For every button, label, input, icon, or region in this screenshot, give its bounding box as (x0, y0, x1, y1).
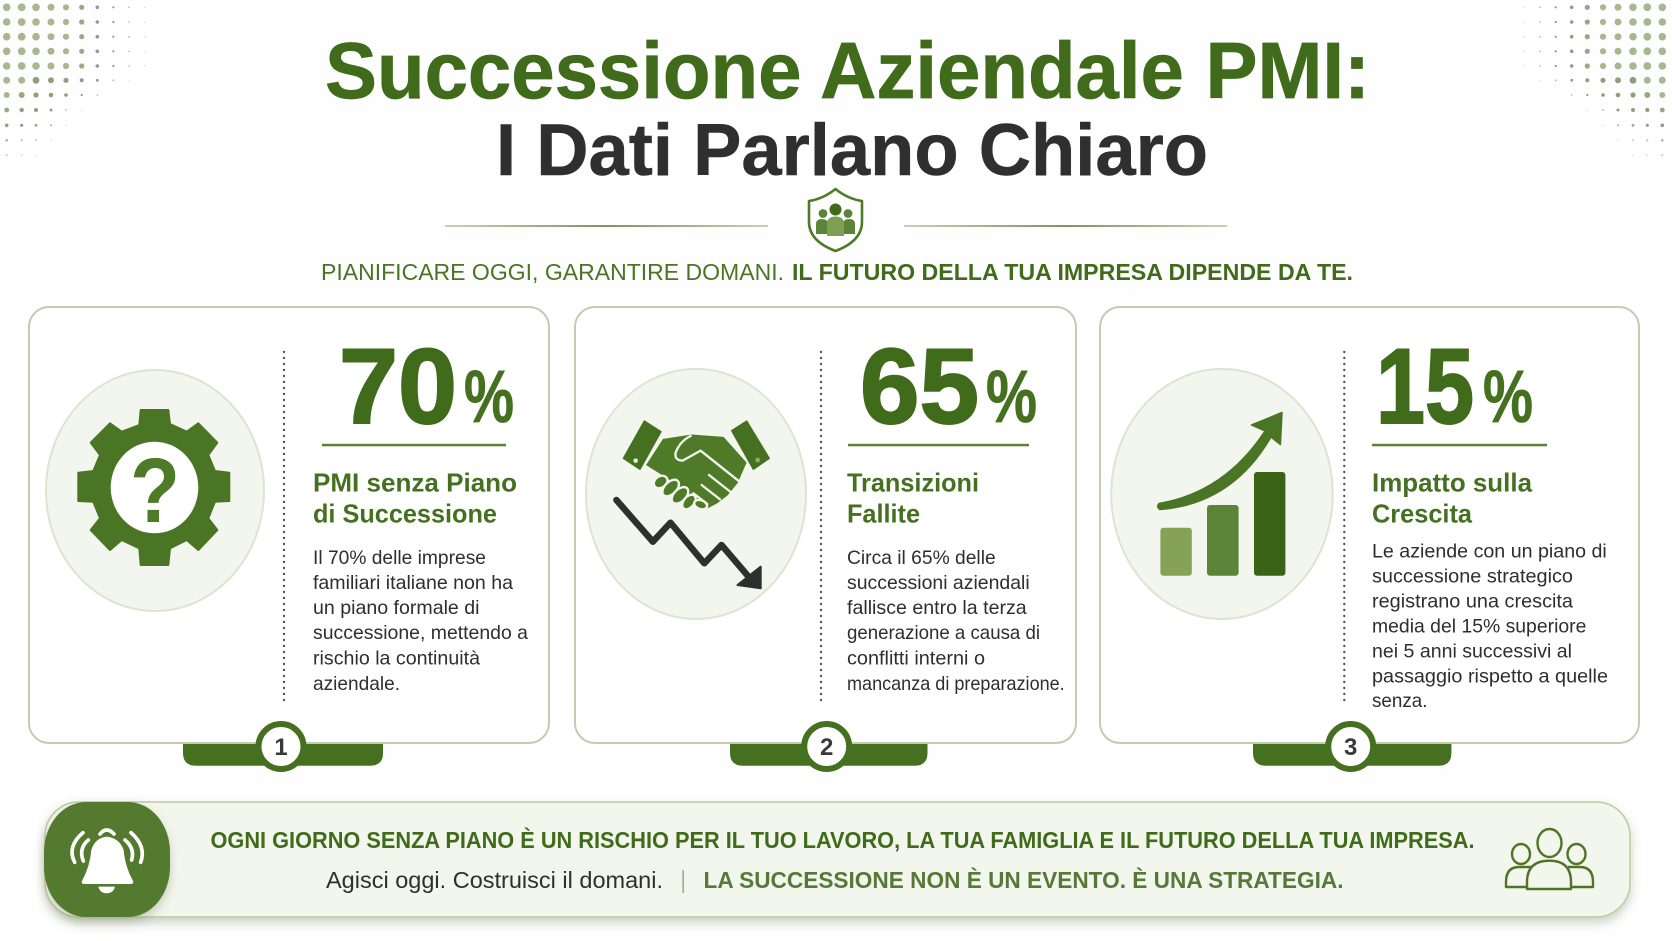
number tab 2 bar (730, 743, 928, 766)
icon: alarm bell on green block (44, 802, 170, 917)
stat 70%: 70 (339, 326, 457, 446)
icon: shield with people (809, 189, 862, 251)
number badge 3: 3 (1344, 734, 1357, 761)
body text: Il 70% delle imprese (313, 547, 486, 569)
heading: Transizioni (847, 468, 979, 498)
footer line: Agisci oggi. Costruisci il domani. (326, 867, 663, 893)
heading (1372, 468, 1533, 529)
body text: successioni aziendali (847, 572, 1030, 594)
stat 70%: % (464, 355, 514, 438)
icon circle: gear with question mark: ? (130, 440, 180, 542)
body text: successione, mettendo a (313, 622, 528, 644)
body text: Circa il 65% delle (847, 547, 996, 569)
dotted separator (820, 352, 822, 702)
body text: nei 5 anni successivi al (1372, 640, 1572, 662)
panel: footer callout (44, 802, 1630, 917)
heading: Crescita (1372, 499, 1473, 529)
heading (313, 468, 517, 529)
icon: people outline (1506, 829, 1593, 889)
body text: Le aziende con un piano di (1372, 540, 1607, 562)
icon: handshake (623, 421, 769, 512)
panel: card 3 (1100, 307, 1639, 769)
body text: passaggio rispetto a quelle (1372, 666, 1608, 688)
stat 15%: % (1483, 355, 1533, 438)
footer line (326, 866, 1344, 893)
body text (313, 547, 528, 695)
body text: generazione a causa di (847, 622, 1040, 644)
number badge 1 (258, 724, 304, 769)
body text: successione strategico (1372, 566, 1573, 588)
heading: Fallite (847, 499, 920, 529)
panel: card 2 (575, 307, 1076, 769)
arrow: falling zigzag (616, 500, 761, 588)
title (325, 26, 1370, 191)
stat 15%: 15 (1376, 326, 1474, 446)
body text: mancanza di preparazione. (847, 673, 1065, 695)
title: Successione Aziendale PMI: (325, 26, 1370, 115)
body text: registrano una crescita (1372, 590, 1573, 612)
stat 65%: % (986, 355, 1037, 438)
heading: di Successione (313, 499, 497, 529)
panel: card 1 (29, 307, 549, 769)
heading: Impatto sulla (1372, 468, 1533, 498)
footer line: LA SUCCESSIONE NON È UN EVENTO. È UNA STRATEGIA. (704, 866, 1344, 893)
subtitle: PIANIFICARE OGGI, GARANTIRE DOMANI. (321, 259, 784, 285)
stat 65% (860, 326, 1037, 446)
icon circle: handshake and falling chart (586, 369, 806, 619)
body text: familiari italiane non ha (313, 572, 513, 594)
number tab 1 bar (183, 743, 383, 766)
body text: fallisce entro la terza (847, 597, 1027, 619)
number badge 3 (1328, 724, 1373, 769)
number badge 2 (804, 724, 849, 769)
icon circle: gear with question mark (46, 370, 264, 611)
number tab 3 bar (1253, 743, 1451, 766)
body text: media del 15% superiore (1372, 616, 1586, 638)
decorative dots top right (1523, 3, 1666, 156)
body text: senza. (1372, 690, 1428, 712)
title: I Dati Parlano Chiaro (496, 110, 1208, 191)
body text: conflitti interni o (847, 648, 985, 670)
stat 65%: 65 (860, 326, 979, 446)
number badge 2: 2 (820, 734, 833, 761)
stat 70% (339, 326, 514, 446)
body text (1372, 540, 1608, 712)
number badge 1: 1 (274, 734, 288, 761)
body text: aziendale. (313, 673, 400, 695)
decorative dots top left (3, 3, 146, 156)
body text (847, 547, 1065, 695)
icon circle: growth chart (1111, 369, 1333, 619)
body text: un piano formale di (313, 597, 480, 619)
footer headline: OGNI GIORNO SENZA PIANO È UN RISCHIO PER IL TUO LAVORO, LA TUA FAMIGLIA E IL FUTURO DELLA TUA IMPRESA. (210, 826, 1474, 853)
dotted separator (1343, 352, 1346, 702)
heading: PMI senza Piano (313, 468, 517, 498)
dotted separator (283, 352, 285, 702)
subtitle: IL FUTURO DELLA TUA IMPRESA DIPENDE DA TE. (792, 259, 1353, 285)
subtitle (321, 259, 1353, 285)
heading (847, 468, 979, 529)
body text: rischio la continuità (313, 648, 480, 670)
divider with shield icon (445, 189, 1227, 251)
